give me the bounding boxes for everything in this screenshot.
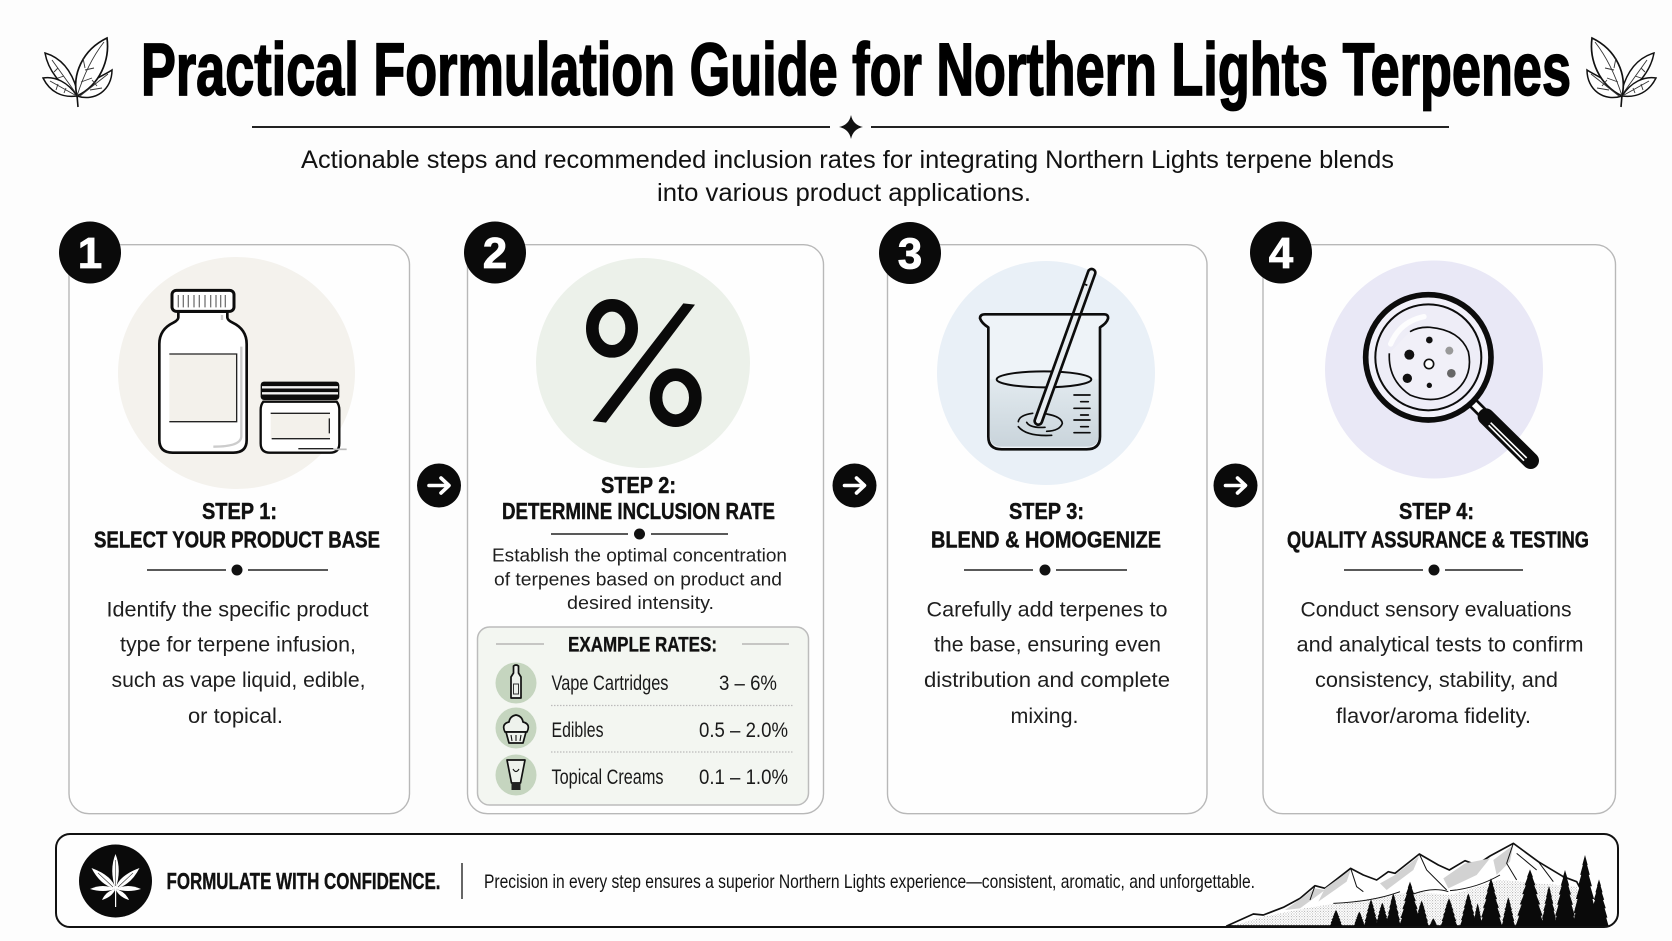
heading 2: STEP 2: xyxy=(601,472,676,498)
icon: cannabis leaf xyxy=(79,844,152,918)
subtitle: Actionable steps and recommended inclusion rates for integrating Northern Lights terpene blends xyxy=(301,146,1394,174)
badge 3: 3 xyxy=(898,230,922,278)
panel: example rates xyxy=(478,627,808,805)
badge 2 xyxy=(464,222,526,284)
illustration: mountains and pines xyxy=(1227,843,1609,926)
subtitle xyxy=(301,146,1394,207)
badge 2: 2 xyxy=(483,229,507,278)
panel: step 3 xyxy=(879,222,1207,814)
arrow 3 xyxy=(1214,464,1258,508)
icon circle 3 xyxy=(937,261,1155,485)
badge 4 xyxy=(1250,222,1312,284)
body text 3: mixing. xyxy=(1010,704,1078,728)
icon circle 2 xyxy=(536,258,750,468)
heading 3 xyxy=(931,498,1161,552)
subtitle: into various product applications. xyxy=(657,179,1031,207)
badge 4: 4 xyxy=(1269,229,1294,278)
body text 4: flavor/aroma fidelity. xyxy=(1336,704,1531,728)
rate row: edibles: 0.5 – 2.0% xyxy=(699,719,788,742)
body text 1 xyxy=(106,598,369,728)
body text 3: the base, ensuring even xyxy=(934,632,1161,656)
heading 4: STEP 4: xyxy=(1399,498,1474,524)
panel: example rates: EXAMPLE RATES: xyxy=(568,634,717,656)
heading 4 xyxy=(1287,498,1589,552)
title divider with star xyxy=(252,115,1449,139)
panel: step 4 xyxy=(1250,222,1616,814)
heading 4: QUALITY ASSURANCE & TESTING xyxy=(1287,526,1589,552)
panel: step 2 xyxy=(464,222,824,814)
body text 2: desired intensity. xyxy=(567,593,714,613)
heading 3: STEP 3: xyxy=(1009,498,1084,524)
body text 2: of terpenes based on product and xyxy=(494,570,782,590)
rate row: vape cartridges: 3 – 6% xyxy=(719,672,777,695)
heading 3: BLEND & HOMOGENIZE xyxy=(931,526,1161,552)
rate row: topical creams: Topical Creams xyxy=(552,766,664,789)
footer message: Precision in every step ensures a superior Northern Lights experience—consistent, aromatic, and unforgettable. xyxy=(484,871,1255,893)
footer heading: FORMULATE WITH CONFIDENCE. xyxy=(166,868,440,894)
panel: step 1 xyxy=(59,222,410,814)
body text 1: or topical. xyxy=(188,704,283,728)
badge 1 xyxy=(59,222,121,284)
rate row: edibles: Edibles xyxy=(552,719,604,742)
arrow 1 xyxy=(417,464,461,508)
heading 1: STEP 1: xyxy=(202,498,277,524)
footer banner xyxy=(56,834,1618,927)
heading 1: SELECT YOUR PRODUCT BASE xyxy=(94,526,380,552)
card 3 outline xyxy=(888,245,1207,814)
heading 2 xyxy=(502,472,775,524)
body text 2: Establish the optimal concentration xyxy=(492,546,787,566)
rate row: topical creams: 0.1 – 1.0% xyxy=(699,766,788,789)
body text 4: consistency, stability, and xyxy=(1315,668,1558,692)
icon: left leaf xyxy=(43,38,112,107)
heading 2: DETERMINE INCLUSION RATE xyxy=(502,498,775,524)
rate row: vape cartridges xyxy=(496,662,777,704)
body text 3: Carefully add terpenes to xyxy=(926,598,1168,622)
body text 1: Identify the specific product xyxy=(106,598,369,622)
icon: magnifying glass xyxy=(1366,295,1531,461)
icon: bottle and jar xyxy=(159,290,347,453)
body text 3: distribution and complete xyxy=(924,668,1170,692)
icon: beaker with stirring rod xyxy=(980,273,1108,449)
body text 4: and analytical tests to confirm xyxy=(1296,632,1584,656)
body text 2 xyxy=(492,546,787,613)
body text 4 xyxy=(1296,598,1584,728)
arrow 2 xyxy=(832,464,876,508)
card 4 outline xyxy=(1263,245,1616,814)
rate row: edibles xyxy=(496,708,788,748)
icon circle 4 xyxy=(1325,260,1543,478)
body text 1: type for terpene infusion, xyxy=(120,632,356,656)
rate row: topical creams xyxy=(496,754,788,796)
icon: right leaf xyxy=(1587,38,1656,107)
card 2 outline xyxy=(468,245,824,814)
body text 4: Conduct sensory evaluations xyxy=(1300,598,1572,622)
body text 1: such as vape liquid, edible, xyxy=(112,668,366,692)
icon: percent sign xyxy=(592,303,695,423)
badge 1: 1 xyxy=(78,229,102,278)
badge 3 xyxy=(879,222,941,284)
header xyxy=(43,28,1656,207)
icon circle 1 xyxy=(118,257,355,489)
body text 3 xyxy=(924,598,1170,728)
card 1 outline xyxy=(69,245,410,814)
rate row: vape cartridges: Vape Cartridges xyxy=(552,672,668,695)
heading 1 xyxy=(94,498,380,552)
